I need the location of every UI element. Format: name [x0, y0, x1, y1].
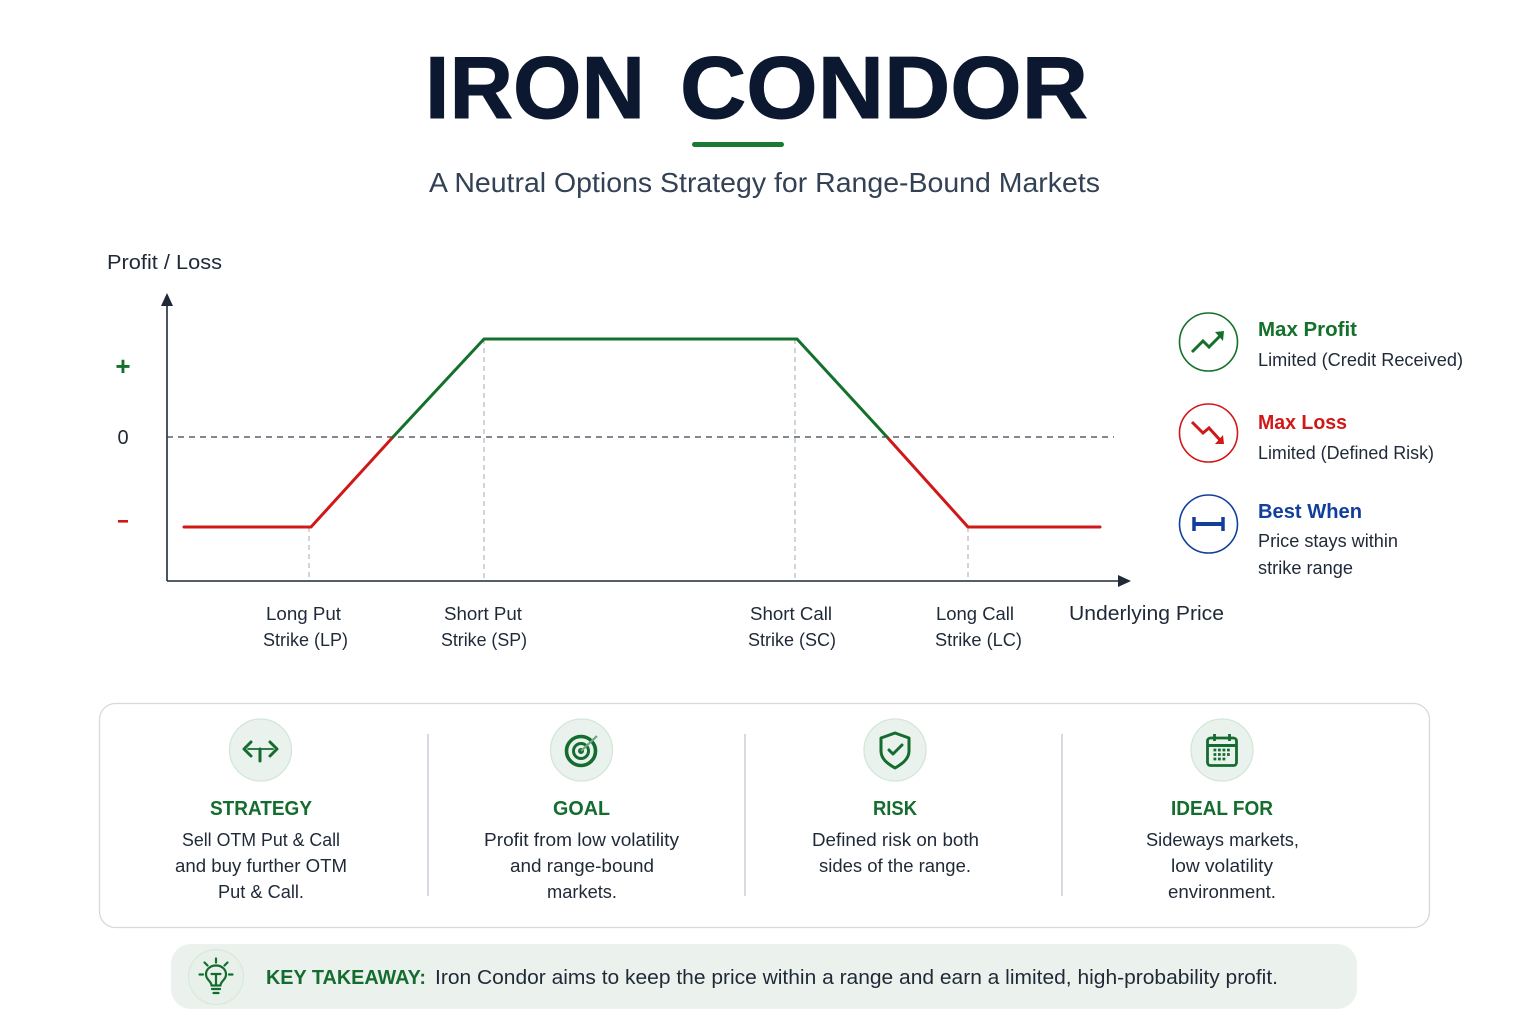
icon: light bulb: [188, 950, 244, 1004]
heading: RISK: [873, 798, 917, 820]
heading: STRATEGY: [210, 798, 313, 820]
column: risk: [812, 719, 979, 876]
legend: max loss: [1180, 404, 1434, 463]
heading: Best When: [1258, 500, 1362, 523]
description: [484, 830, 679, 902]
description: [1258, 531, 1398, 578]
short put strike label: [441, 604, 527, 650]
panel border: [100, 704, 1430, 928]
long put strike label: Long Put: [266, 604, 341, 624]
title underline: [692, 142, 784, 147]
column: goal: [484, 719, 679, 902]
column: strategy: [175, 719, 347, 902]
title: [425, 38, 1088, 137]
description: Sell OTM Put & Call: [182, 830, 340, 850]
zero line: [167, 436, 1114, 438]
icon: range: [1180, 495, 1238, 553]
loss segments: [184, 437, 1100, 527]
description: Put & Call.: [218, 882, 304, 902]
description: Price stays within: [1258, 531, 1398, 551]
icon: trending up: [1180, 313, 1238, 371]
description: [1146, 830, 1299, 902]
description: Limited (Credit Received): [1258, 350, 1463, 370]
legend: max profit: [1180, 313, 1463, 371]
short call strike label: Short Call: [750, 604, 832, 624]
icon: shield: [864, 719, 926, 781]
icon: calendar: [1191, 719, 1253, 781]
description: and buy further OTM: [175, 856, 347, 876]
profit segment: [393, 339, 887, 437]
icon: target: [550, 719, 612, 781]
description: [812, 830, 979, 876]
short put strike label: Strike (SP): [441, 630, 527, 650]
key takeaway banner: [171, 944, 1357, 1009]
long call strike label: [935, 604, 1022, 650]
icon: strategy arrows: [230, 719, 292, 781]
subtitle: A Neutral Options Strategy for Range-Bound Markets: [429, 167, 1100, 198]
x axis: [167, 575, 1131, 587]
description: environment.: [1168, 882, 1276, 902]
description: Sideways markets,: [1146, 830, 1299, 850]
description: Profit from low volatility: [484, 830, 679, 850]
panel: summary: [100, 704, 1430, 928]
short call strike label: Strike (SC): [748, 630, 836, 650]
short put strike label: Short Put: [444, 604, 522, 624]
y label plus: +: [115, 351, 131, 381]
long call strike label: Long Call: [936, 604, 1014, 624]
description: strike range: [1258, 558, 1353, 578]
strike guide lines: [309, 339, 968, 581]
y label zero: 0: [117, 427, 129, 449]
heading: Max Profit: [1258, 318, 1357, 341]
description: Defined risk on both: [812, 830, 979, 850]
icon: trending down: [1180, 404, 1238, 462]
title: IRON: [425, 38, 645, 137]
description: [175, 830, 347, 902]
description: sides of the range.: [819, 856, 971, 876]
y label minus: [118, 520, 128, 523]
description: and range-bound: [510, 856, 654, 876]
y axis title: Profit / Loss: [107, 252, 222, 274]
payoff chart: [107, 252, 1224, 650]
heading: GOAL: [553, 798, 610, 820]
heading: Max Loss: [1258, 411, 1347, 434]
long put strike label: [263, 604, 348, 650]
long put strike label: Strike (LP): [263, 630, 348, 650]
y axis: [161, 293, 173, 581]
title: CONDOR: [680, 38, 1088, 137]
takeaway text: Iron Condor aims to keep the price within a range and earn a limited, high-probability profit.: [435, 966, 1278, 989]
banner background: [171, 944, 1357, 1009]
heading: IDEAL FOR: [1171, 798, 1274, 820]
x axis title: Underlying Price: [1069, 602, 1224, 625]
short call strike label: [748, 604, 836, 650]
takeaway label: KEY TAKEAWAY:: [266, 966, 426, 989]
column: ideal for: [1146, 719, 1299, 902]
legend: best when: [1180, 495, 1398, 578]
description: Limited (Defined Risk): [1258, 443, 1434, 463]
description: markets.: [547, 882, 617, 902]
column dividers: [428, 734, 1062, 896]
description: low volatility: [1171, 856, 1273, 876]
legend: [1180, 313, 1463, 578]
long call strike label: Strike (LC): [935, 630, 1022, 650]
